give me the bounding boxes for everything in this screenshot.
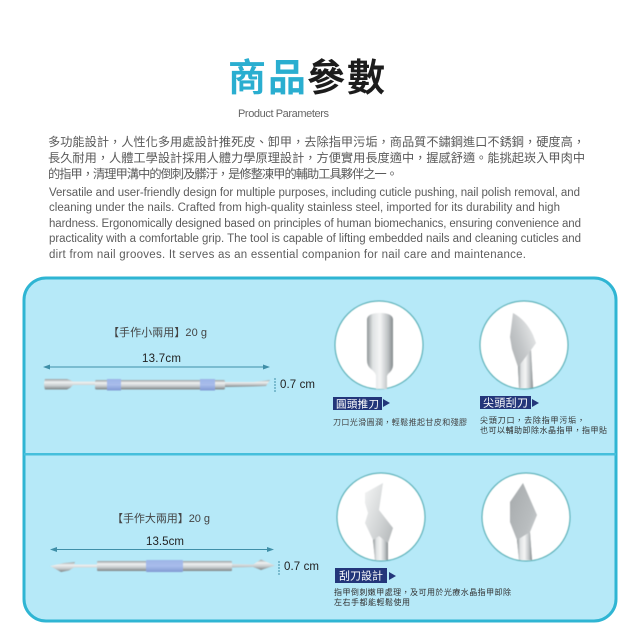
icon: pointed scraper close-up: [480, 301, 568, 389]
large tool length label: 13.5cm: [146, 536, 184, 548]
label: round pusher: 圓頭推刀: [336, 398, 379, 410]
english description: practicality with a comfortable grip. The tool is capable of lifting embedded nails and cleaning cuticles and: [49, 233, 581, 245]
english description: hardness. Ergonomically designed based on principles of human biomechanics, ensuring convenience and: [49, 218, 581, 230]
english description: Versatile and user-friendly design for multiple purposes, including cuticle pushing, nail polish removal, and: [49, 187, 580, 199]
chinese description: 長久耐用，人體工學設計採用人體力學原理設計，方便實用長度適中，握感舒適。能挑起崁入甲肉中: [48, 150, 585, 165]
caption: pointed scraper: 也可以輔助卸除水晶指甲，指甲貼: [480, 425, 607, 435]
panel: product background: [24, 278, 616, 621]
small tool length arrow: [43, 364, 270, 370]
label: scraper design: 刮刀設計: [339, 568, 383, 582]
icon: round pusher close-up: [335, 301, 423, 389]
small tool illustration: [44, 379, 270, 390]
large tool info: [50, 511, 319, 575]
english description: dirt from nail grooves. It serves as an essential companion for nail care and maintenance.: [49, 249, 526, 261]
english description: cleaning under the nails. Crafted from high-quality stainless steel, imported for its durability and high: [49, 202, 560, 214]
english description: [49, 187, 581, 261]
caption: round pusher: 刀口光滑圓潤，輕鬆推起甘皮和殘膠: [333, 417, 467, 428]
small tool length label: 13.7cm: [142, 353, 181, 365]
chinese description: 的指甲，清理甲溝中的倒刺及髒汙，是修整凍甲的輔助工具夥伴之一。: [48, 166, 398, 181]
caption: scraper design: 左右手都能輕鬆使用: [334, 597, 410, 607]
caption: pointed scraper: [480, 415, 607, 435]
chinese description: 多功能設計，人性化多用處設計推死皮、卸甲，去除指甲污垢，商品質不鏽鋼進口不銹鋼，硬度高，: [48, 134, 585, 149]
label: pointed scraper: [480, 396, 539, 410]
panel divider: [24, 453, 616, 456]
caption: scraper design: 指甲倒刺嫩甲處理，及可用於光療水晶指甲卸除: [334, 587, 511, 597]
caption: pointed scraper: 尖頭刀口，去除指甲污垢，: [480, 415, 585, 425]
large tool length arrow: [50, 547, 274, 552]
title: [228, 58, 385, 100]
title: 商品: [228, 58, 306, 100]
large tool illustration: [50, 560, 275, 572]
large tool thickness label: 0.7 cm: [284, 561, 319, 573]
label: pointed scraper: 尖頭刮刀: [483, 396, 528, 410]
caption: scraper design: [334, 587, 511, 607]
small tool thickness label: 0.7 cm: [280, 379, 315, 391]
small tool weight label: 【手作小兩用】20 g: [108, 325, 207, 339]
icon: diamond scraper close-up: [482, 473, 570, 561]
subtitle: Product Parameters: [238, 108, 330, 120]
chinese description: [48, 134, 585, 181]
label: scraper design: [335, 568, 396, 583]
small tool info: [43, 325, 315, 392]
icon: scraper close-up: [337, 473, 425, 561]
large tool weight label: 【手作大兩用】20 g: [112, 511, 210, 525]
title: 參數: [307, 58, 385, 100]
label: round pusher: [333, 397, 390, 410]
